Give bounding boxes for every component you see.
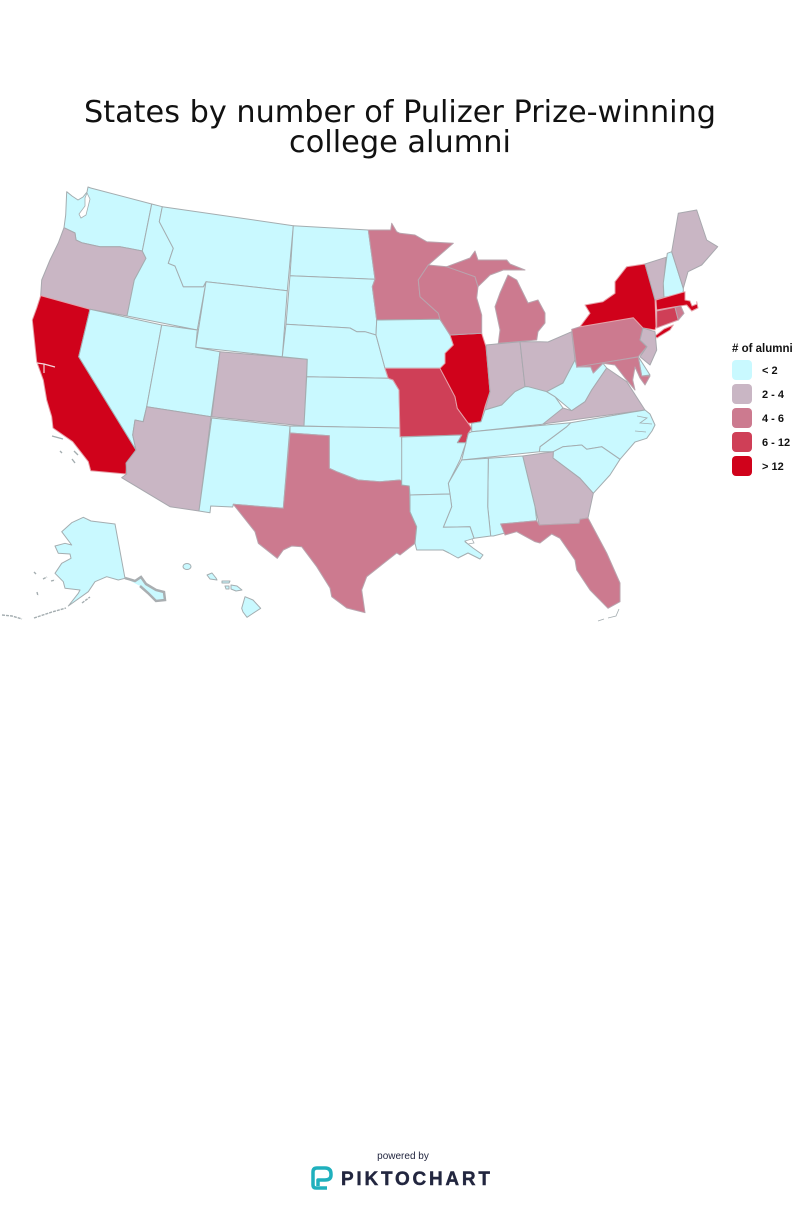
state: Wyoming bbox=[196, 282, 287, 357]
Florida Keys bbox=[598, 609, 619, 621]
state: Ohio bbox=[520, 332, 575, 392]
state: Alabama bbox=[488, 456, 537, 536]
state: Connecticut bbox=[657, 307, 678, 328]
Lake Pontchartrain bbox=[465, 539, 474, 544]
state: Michigan upper peninsula bbox=[447, 251, 525, 287]
state: Colorado bbox=[212, 352, 307, 426]
Alaska panhandle islands bbox=[125, 577, 165, 601]
state: Michigan lower peninsula bbox=[495, 275, 545, 343]
state: North Carolina bbox=[539, 410, 655, 459]
state: New York bbox=[580, 264, 656, 330]
state: California bbox=[32, 296, 136, 474]
powered by text: powered by bbox=[377, 1151, 429, 1162]
state: Nebraska bbox=[282, 324, 388, 378]
choropleth map of US states bbox=[2, 187, 718, 621]
state: Nevada bbox=[79, 309, 162, 450]
state: Hawaii bbox=[183, 564, 261, 617]
state: Georgia bbox=[523, 452, 593, 525]
state: New Mexico bbox=[199, 418, 290, 513]
icon: Piktochart logo bbox=[313, 1168, 331, 1188]
Puget Sound bbox=[79, 193, 90, 218]
state: Minnesota bbox=[368, 223, 453, 320]
Pamlico Sound inlets bbox=[635, 416, 652, 432]
state: New Hampshire bbox=[663, 252, 683, 297]
state: Tennessee bbox=[462, 423, 571, 460]
Piktochart wordmark: PIKTOCHART bbox=[341, 1169, 490, 1190]
state: Iowa bbox=[376, 319, 453, 368]
state: Pennsylvania bbox=[572, 318, 647, 367]
Maui bbox=[231, 585, 242, 591]
state: Oregon bbox=[41, 228, 146, 316]
state: Idaho bbox=[127, 204, 206, 330]
legend item: 4 to 6: 4 - 6 bbox=[762, 413, 784, 425]
legend item: 2 to 4: 2 - 4 bbox=[762, 389, 785, 401]
state: Rhode Island bbox=[675, 306, 684, 320]
legend item: over 12: > 12 bbox=[762, 461, 784, 473]
state: Alaska bbox=[55, 517, 125, 606]
Kauai bbox=[183, 564, 191, 570]
state: Texas bbox=[233, 433, 417, 613]
state: Kentucky bbox=[472, 387, 563, 432]
legend item: 6 to 12: 6 - 12 bbox=[762, 437, 790, 449]
state: Massachusetts bbox=[656, 292, 698, 311]
state: Utah bbox=[147, 325, 220, 417]
state: Montana bbox=[159, 207, 293, 291]
title: college alumni bbox=[289, 125, 511, 160]
state: Oklahoma bbox=[290, 426, 403, 485]
California Channel Islands bbox=[52, 436, 78, 463]
state: North Dakota bbox=[290, 226, 375, 279]
footer: powered by Piktochart bbox=[313, 1151, 490, 1190]
state: West Virginia bbox=[547, 360, 607, 411]
Aleutian islands bbox=[2, 572, 90, 619]
state: Illinois bbox=[440, 333, 490, 423]
state: Indiana bbox=[485, 342, 525, 410]
state: New York, Long Island bbox=[655, 325, 673, 338]
state: Vermont bbox=[645, 257, 666, 300]
state: South Carolina bbox=[553, 445, 620, 493]
San Francisco Bay bbox=[37, 363, 55, 373]
state: Washington bbox=[64, 187, 152, 251]
state: Arkansas bbox=[402, 435, 466, 495]
state: Maryland bbox=[577, 357, 650, 390]
Oahu bbox=[207, 573, 217, 580]
state: Wisconsin bbox=[418, 265, 482, 335]
state: Louisiana bbox=[410, 494, 483, 559]
Hawaii big island bbox=[242, 597, 261, 617]
state: Missouri bbox=[385, 368, 472, 443]
title bbox=[84, 95, 716, 160]
state: Florida bbox=[501, 518, 620, 608]
state: Maine bbox=[672, 210, 718, 288]
state: Delaware bbox=[638, 357, 650, 376]
state: Kansas bbox=[304, 377, 400, 428]
legend bbox=[732, 343, 793, 476]
legend item: under 2: < 2 bbox=[762, 365, 778, 377]
state: South Dakota bbox=[286, 276, 377, 335]
legend title: # of alumni bbox=[732, 343, 793, 355]
title: States by number of Pulizer Prize-winning bbox=[84, 95, 716, 130]
Molokai bbox=[222, 581, 230, 583]
state: Virginia bbox=[543, 368, 645, 424]
Lanai bbox=[225, 586, 229, 589]
state: Mississippi bbox=[443, 458, 491, 538]
state: Arizona bbox=[122, 407, 211, 511]
state: New Jersey bbox=[640, 328, 657, 365]
